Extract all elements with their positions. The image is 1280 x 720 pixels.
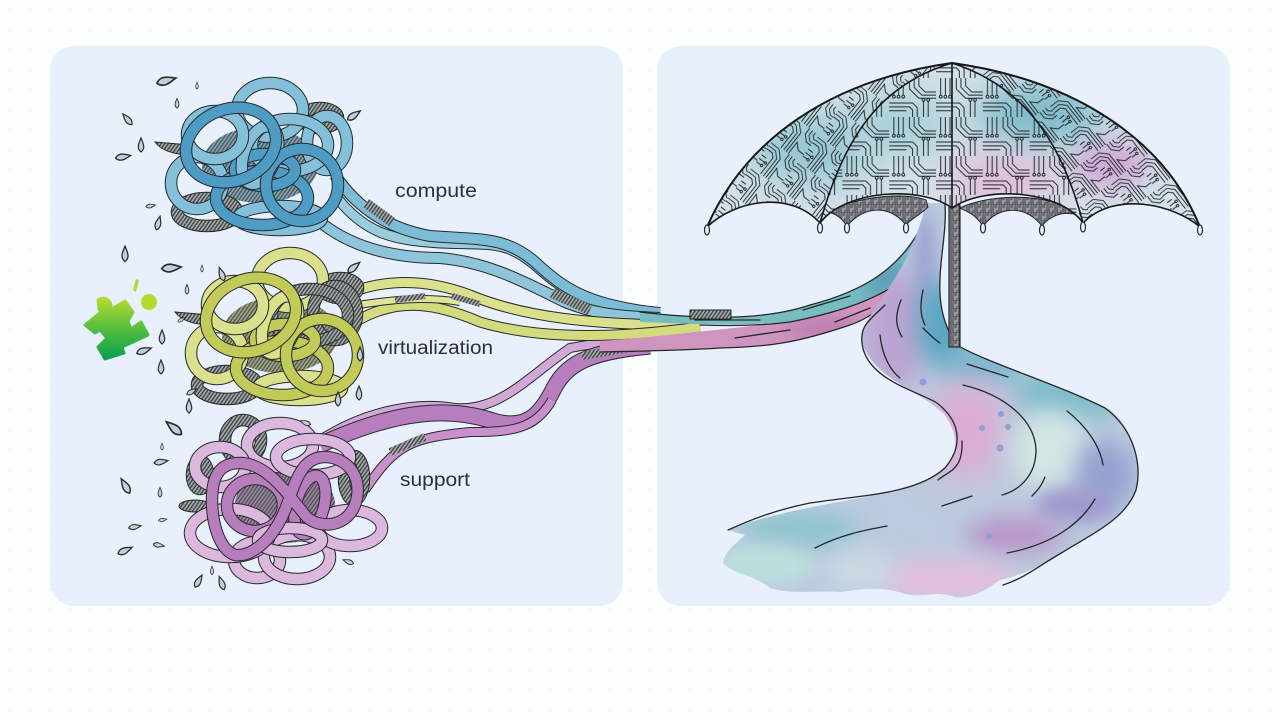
umbrella canopy with circuit pattern [700,55,1210,235]
umbrella [700,55,1210,347]
teal band [640,240,914,324]
pink band [600,291,887,352]
knot: virtualization [175,253,358,400]
ribbons: compute strands [320,175,660,318]
knot: support [179,420,382,579]
panel: tangled sources [50,46,623,606]
droplets [115,74,363,591]
label: support: support [400,470,471,491]
main merged band [599,232,918,353]
ribbons: virtualization strands [352,283,700,335]
label: virtualization: virtualization [378,338,493,359]
icon: green puzzle piece [85,279,157,359]
umbrella underside [826,196,1078,226]
umbrella rib tips [704,222,1202,235]
umbrella pole [949,205,960,347]
knot: compute [155,83,347,230]
ribbons: support strands [320,342,650,490]
river [723,203,1139,598]
panel: umbrella and river [657,46,1230,606]
label: compute: compute [395,181,477,202]
